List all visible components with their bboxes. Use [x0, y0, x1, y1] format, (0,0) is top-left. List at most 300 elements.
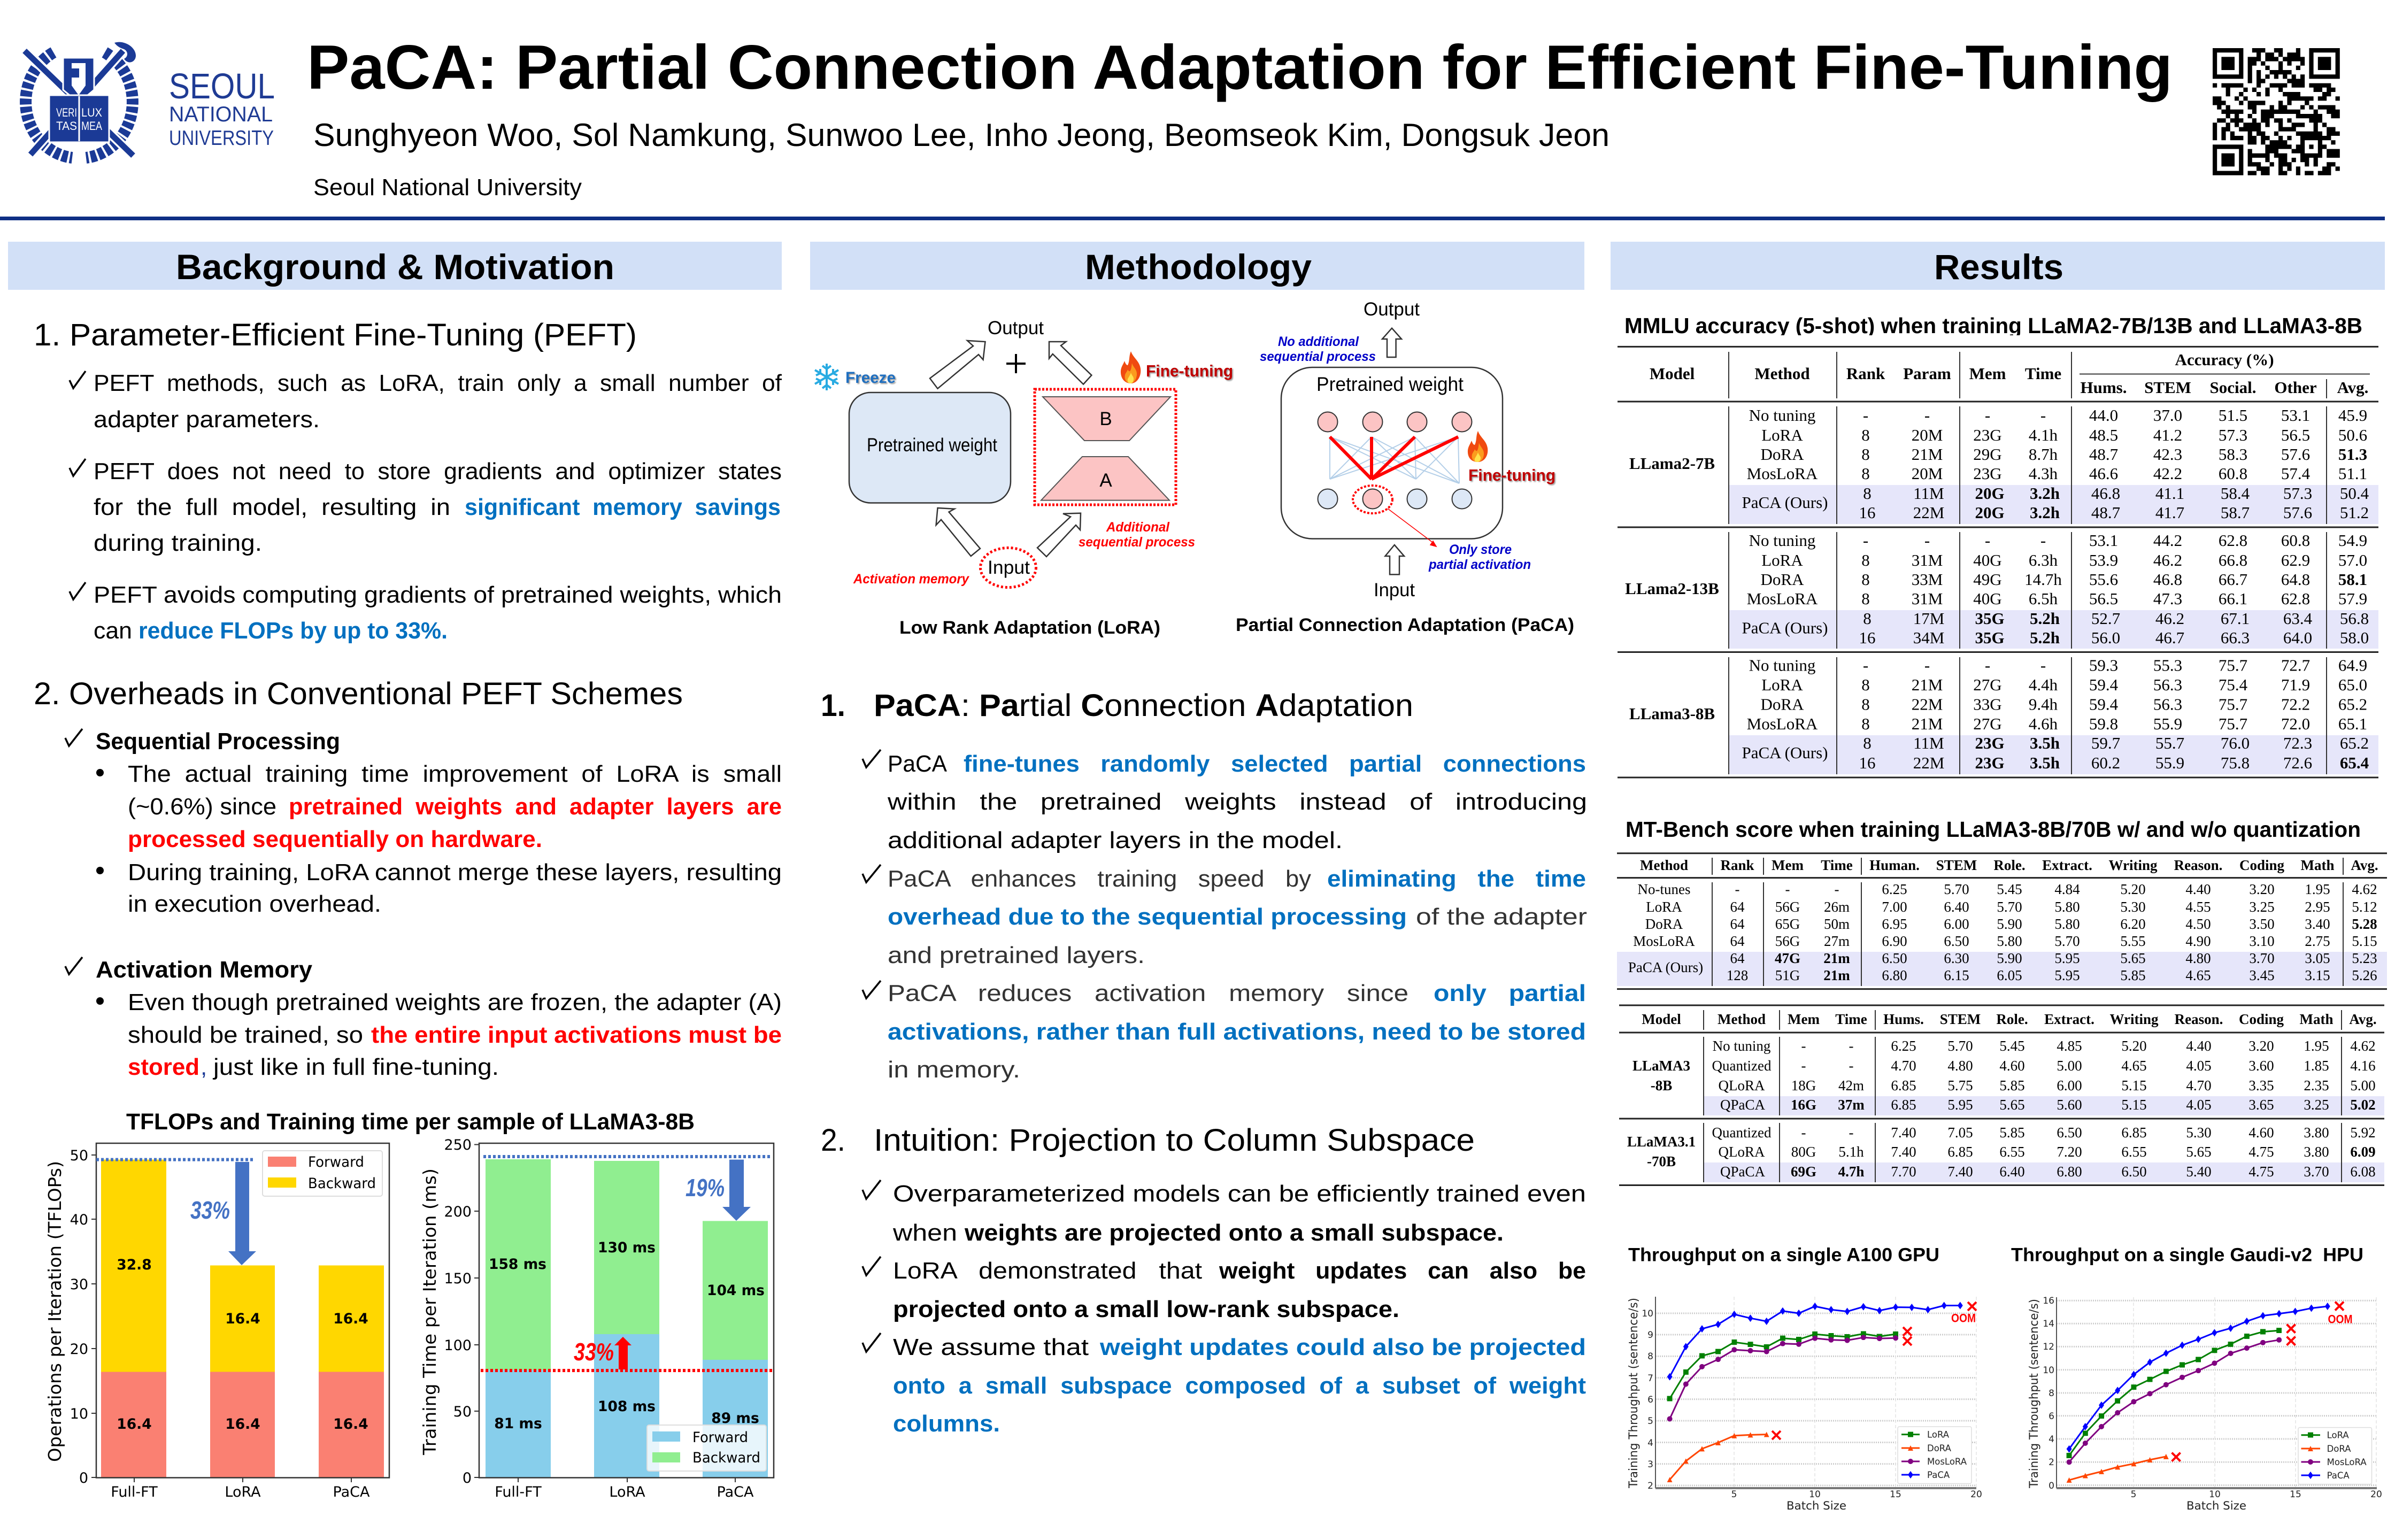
table: MT-Bench without quantization: 4.40: [2185, 881, 2211, 897]
table: MMLU accuracy: LLama2-13B: [1625, 579, 1719, 598]
table: MMLU accuracy: 55.9: [2155, 753, 2184, 772]
table: MT-Bench with quantization: -: [1801, 1058, 1806, 1074]
line chart: Gaudi-v2 throughput: 15: [2290, 1489, 2301, 1500]
table: MT-Bench with quantization: -: [1801, 1038, 1806, 1054]
table: MMLU accuracy: 66.8: [2219, 551, 2247, 569]
title: PaCA: Partial Connection Adaptation for Efficient Fine-Tuning: [307, 32, 2173, 102]
table: MMLU accuracy: 20M: [1912, 464, 1943, 483]
bullet: sequential processing: pretrained weights and adapter layers are: [289, 794, 782, 820]
bar chart: training time: 108 ms: [598, 1398, 656, 1415]
table: MMLU accuracy: 22M: [1913, 753, 1944, 772]
table: MT-Bench without quantization: 4.62: [2352, 881, 2377, 897]
bullet: activation memory: stored: [128, 1054, 199, 1080]
table: MT-Bench with quantization: 4.40: [2186, 1038, 2212, 1054]
table: MT-Bench with quantization: 3.60: [2248, 1058, 2274, 1074]
table: MT-Bench without quantization: 6.20: [2120, 916, 2146, 932]
logo wordmark: [169, 66, 275, 150]
logo wordmark: NATIONAL: [169, 103, 273, 126]
table: MMLU accuracy: No tuning: [1749, 406, 1815, 425]
bullet: sequential processing: processed sequentially on hardware.: [128, 826, 542, 852]
table: MT-Bench with quantization: Writing: [2109, 1011, 2159, 1027]
table: MMLU accuracy: 59.4: [2089, 695, 2119, 713]
table: MT-Bench with quantization: 5.75: [1947, 1077, 1973, 1094]
table: MMLU accuracy: 65.2: [2338, 695, 2367, 713]
table: MT-Bench with quantization: 7.40: [1891, 1125, 1916, 1141]
bullet: column subspace assumption: onto a small subspace composed of a subset of weight: [893, 1373, 1586, 1399]
table: MT-Bench with quantization: 6.00: [2057, 1077, 2082, 1094]
arrow: adapter to output: [1049, 342, 1091, 384]
table: MMLU accuracy: 50.4: [2340, 484, 2369, 503]
series: LoRA: [1670, 1334, 1896, 1399]
bar chart: training time: LoRA: [609, 1484, 645, 1500]
table: MMLU accuracy: -: [1863, 656, 1868, 675]
table: MMLU accuracy: 72.0: [2281, 714, 2310, 733]
bullet: memory savings: during training.: [94, 530, 262, 556]
bullet: activation memory: ,: [201, 1054, 207, 1080]
table: MMLU accuracy: 4.1h: [2029, 426, 2058, 444]
table: MMLU accuracy: 8: [1863, 484, 1872, 503]
table: MT-Bench with quantization: 2.35: [2304, 1077, 2329, 1094]
table: MMLU accuracy: 56.5: [2089, 589, 2118, 608]
table: MMLU accuracy: 40G: [1973, 551, 2002, 569]
chart title: TFLOPs and Training time per sample of LLaMA3-8B: [126, 1109, 695, 1135]
table: MT-Bench without quantization: 4.50: [2185, 916, 2211, 932]
bullet: activation memory: [65, 957, 782, 1080]
bar chart: TFLOPs: 16.4: [225, 1416, 260, 1433]
table: MT-Bench without quantization: 3.10: [2249, 933, 2275, 949]
label: output: Output: [988, 318, 1044, 338]
table: MT-Bench without quantization: 1.95: [2305, 881, 2330, 897]
table: MMLU accuracy: 27G: [1973, 675, 2002, 694]
table: MT-Bench without quantization: [1617, 853, 2387, 989]
table: MMLU accuracy: 65.1: [2338, 714, 2367, 733]
table: MMLU accuracy: 46.7: [2155, 628, 2184, 647]
bullet: activation memory: just like in full fine-tuning.: [212, 1054, 499, 1080]
table: MMLU accuracy: LoRA: [1761, 426, 1803, 444]
table: MMLU accuracy: 75.7: [2219, 656, 2247, 675]
arrow: input to adapter: [1037, 513, 1081, 557]
table: MMLU accuracy: 46.8: [2153, 570, 2182, 589]
table: MT-Bench without quantization: 5.70: [1944, 881, 1969, 897]
table: MMLU accuracy: 8: [1861, 570, 1870, 589]
table: MMLU accuracy: Rank: [1846, 364, 1885, 383]
table: MMLU accuracy: 72.6: [2283, 753, 2312, 772]
bullet: PEFT trains few parameters: PEFT methods, such as LoRA, train only a small number of: [94, 370, 782, 396]
table: MMLU accuracy: 56.3: [2153, 695, 2182, 713]
table: MT-Bench without quantization: 56G: [1775, 933, 1800, 949]
table: MMLU accuracy: 46.8: [2091, 484, 2120, 503]
table: MT-Bench without quantization: 5.55: [2120, 933, 2146, 949]
table: MT-Bench with quantization: -8B: [1651, 1077, 1672, 1094]
table: MT-Bench without quantization: Human.: [1869, 857, 1920, 873]
table: MMLU accuracy: 20G: [1975, 503, 2005, 522]
bullet: sequential processing: in execution overhead.: [128, 891, 381, 917]
arrow: pretrained to output: [930, 341, 985, 389]
line chart: A100 throughput: 2: [1647, 1481, 1653, 1491]
table: MMLU accuracy: 64.0: [2283, 628, 2312, 647]
table: MMLU accuracy: 8: [1863, 609, 1872, 628]
table: MMLU accuracy: 8: [1863, 734, 1872, 752]
table: MT-Bench without quantization: 3.25: [2249, 899, 2275, 915]
table: MT-Bench without quantization: 128: [1727, 967, 1748, 983]
table: MT-Bench with quantization: 6.85: [1891, 1097, 1916, 1113]
table: MT-Bench with quantization: 80G: [1791, 1144, 1816, 1160]
table: MT-Bench with quantization: 5.15: [2121, 1077, 2147, 1094]
table: MMLU accuracy: 27G: [1973, 714, 2002, 733]
table: MMLU accuracy: 57.9: [2338, 589, 2367, 608]
legend: Forward: [308, 1154, 364, 1171]
table: MT-Bench without quantization: 5.90: [1997, 950, 2022, 966]
note: no additional sequential process: No additional: [1278, 334, 1359, 349]
legend: Backward: [308, 1175, 376, 1192]
table: MT-Bench without quantization: 3.15: [2305, 967, 2330, 983]
table: MT-Bench with quantization: 4.75: [2248, 1164, 2274, 1180]
table: MMLU accuracy: 55.7: [2155, 734, 2184, 752]
table: MT-Bench with quantization: 5.00: [2057, 1058, 2082, 1074]
table: MMLU accuracy: 59.3: [2089, 656, 2118, 675]
table: MT-Bench with quantization: QLoRA: [1719, 1077, 1765, 1094]
caption: LoRA: Low Rank Adaptation (LoRA): [899, 618, 1160, 638]
note: only store partial activation: partial activation: [1428, 557, 1531, 572]
line chart: Gaudi-v2 throughput: 16: [2043, 1296, 2054, 1306]
table: MT-Bench without quantization: Writing: [2108, 857, 2158, 873]
table: MT-Bench with quantization: Model: [1642, 1011, 1681, 1027]
table: MMLU accuracy: No tuning: [1749, 531, 1815, 550]
chart title: Gaudi-v2: Throughput on a single Gaudi-v2 HPU: [2011, 1245, 2363, 1265]
section heading: Results: [1611, 242, 2385, 290]
bar chart: TFLOPs: 20: [70, 1341, 88, 1358]
table: MMLU accuracy: 35G: [1975, 628, 2005, 647]
table: MT-Bench with quantization: LLaMA3: [1632, 1058, 1690, 1074]
table: MT-Bench without quantization: 6.40: [1944, 899, 1969, 915]
table: MMLU accuracy: 6.3h: [2029, 551, 2058, 569]
table: MT-Bench with quantization: 1.95: [2304, 1038, 2329, 1054]
OOM markers: [2172, 1302, 2353, 1461]
table: MMLU accuracy: 59.8: [2089, 714, 2118, 733]
table: MT-Bench with quantization: 4.16: [2350, 1058, 2376, 1074]
table: MMLU accuracy: 52.7: [2091, 609, 2120, 628]
legend: PaCA: [2327, 1470, 2350, 1481]
table: MMLU accuracy: 53.1: [2089, 531, 2118, 550]
note: activation memory: Activation memory: [853, 572, 969, 587]
table: MT-Bench without quantization: 27m: [1824, 933, 1850, 949]
table: MMLU accuracy: 64.8: [2281, 570, 2310, 589]
table: MT-Bench with quantization: 6.85: [2121, 1125, 2147, 1141]
section heading: Methodology: [810, 242, 1584, 290]
table: MT-Bench without quantization: 6.05: [1997, 967, 2022, 983]
table: MMLU accuracy: 53.9: [2089, 551, 2118, 569]
bullet: training speed: eliminating the time: [1327, 866, 1586, 892]
caption: PaCA: Partial Connection Adaptation (PaCA): [1236, 615, 1574, 635]
table: MMLU accuracy: 51.3: [2338, 445, 2367, 464]
table: MMLU accuracy: 67.1: [2221, 609, 2250, 628]
table: MMLU accuracy: 71.9: [2281, 675, 2310, 694]
table: MMLU accuracy: 20M: [1912, 426, 1943, 444]
table: MT-Bench without quantization: MosLoRA: [1633, 933, 1695, 949]
legend: LoRA: [2327, 1430, 2349, 1441]
table: MMLU accuracy: 59.4: [2089, 675, 2119, 694]
table: MT-Bench with quantization: 6.85: [1891, 1077, 1916, 1094]
table: MMLU accuracy: 48.5: [2089, 426, 2118, 444]
bar chart: training time: 100: [444, 1337, 472, 1354]
arrow: to partial activation note: [1388, 509, 1436, 546]
line chart: A100 throughput: 10: [1642, 1308, 1653, 1319]
table: MMLU accuracy: LoRA: [1761, 675, 1803, 694]
bar chart: training time: 250: [444, 1137, 472, 1153]
table: MT-Bench with quantization: 5.85: [1999, 1077, 2025, 1094]
table: MT-Bench without quantization: 5.80: [2054, 916, 2080, 932]
table: MMLU accuracy: STEM: [2144, 378, 2191, 397]
bullet: activation memory: in memory.: [888, 1057, 1020, 1083]
bullet: partial connections: PaCA: [888, 751, 948, 777]
table: MMLU accuracy: 8: [1861, 714, 1870, 733]
table: MT-Bench with quantization: 6.50: [2057, 1125, 2082, 1141]
table: MMLU accuracy: 56.3: [2153, 675, 2182, 694]
label: output: Output: [1364, 299, 1420, 320]
table: MT-Bench without quantization: 5.85: [2120, 967, 2146, 983]
table: MT-Bench with quantization: 16G: [1791, 1097, 1816, 1113]
series: PaCA: [1670, 1306, 1960, 1377]
line chart: A100 throughput: 3: [1647, 1459, 1653, 1470]
bullet: column subspace assumption: We assume that: [893, 1334, 1089, 1360]
table: MMLU accuracy: LoRA: [1761, 551, 1803, 569]
table: MMLU accuracy: -: [1924, 656, 1930, 675]
table: MMLU accuracy: Avg.: [2337, 378, 2368, 397]
table: MT-Bench with quantization: Reason.: [2175, 1011, 2223, 1027]
table: MT-Bench without quantization: 4.90: [2185, 933, 2211, 949]
bar chart: TFLOPs: 50: [70, 1148, 88, 1164]
table: MT-Bench with quantization: 4.80: [1947, 1058, 1973, 1074]
table: MT-Bench without quantization: 64: [1730, 950, 1745, 966]
table: MMLU accuracy: 5.2h: [2030, 628, 2060, 647]
table: MMLU accuracy: 4.6h: [2029, 714, 2058, 733]
bar chart: TFLOPs: [44, 1143, 389, 1500]
table: MMLU accuracy: MosLoRA: [1747, 714, 1818, 733]
table: MT-Bench without quantization: 65G: [1775, 916, 1800, 932]
table: MMLU accuracy: 65.4: [2340, 753, 2369, 772]
affiliation: Seoul National University: [313, 174, 582, 201]
bullet: training speed: of the adapter: [1416, 904, 1587, 930]
arrow: 33% reduction: [228, 1162, 256, 1265]
icon: flame: [1121, 351, 1141, 383]
bar chart: training time: 130 ms: [598, 1239, 656, 1256]
block: pretrained weight: [849, 392, 1011, 503]
arrow: to output: [1382, 328, 1401, 357]
line chart: A100 throughput: [1627, 1297, 1982, 1512]
table: MMLU accuracy: 33G: [1973, 695, 2002, 713]
table: MMLU accuracy: 8: [1861, 445, 1870, 464]
table: MT-Bench without quantization: PaCA (Ours): [1628, 959, 1703, 975]
table: MT-Bench without quantization: 50m: [1824, 916, 1850, 932]
table: MT-Bench with quantization: 5.65: [2186, 1144, 2212, 1160]
table: MT-Bench without quantization: 3.70: [2249, 950, 2275, 966]
table: MT-Bench with quantization: 5.40: [2186, 1164, 2212, 1180]
line chart: Gaudi-v2 throughput: 12: [2043, 1342, 2054, 1352]
arrow: input to pretrained: [936, 508, 980, 556]
table: MT-Bench with quantization: 18G: [1791, 1077, 1816, 1094]
table: MT-Bench with quantization: 3.80: [2304, 1125, 2329, 1141]
bullet: PEFT trains few parameters: adapter parameters.: [94, 406, 320, 433]
table: MT-Bench without quantization: 3.05: [2305, 950, 2330, 966]
legend: [1898, 1427, 1972, 1483]
block: adapter layers: [1035, 389, 1176, 505]
table: MT-Bench with quantization: 6.50: [2121, 1164, 2147, 1180]
block: adapter layers: B: [1099, 409, 1112, 429]
bar chart: training time: 200: [444, 1204, 472, 1220]
line chart: Gaudi-v2 throughput: 6: [2049, 1411, 2054, 1422]
line chart: A100 throughput: 9: [1647, 1330, 1653, 1341]
table: MT-Bench with quantization: 7.20: [2057, 1144, 2082, 1160]
table: MT-Bench without quantization: 3.20: [2249, 881, 2275, 897]
bar chart: TFLOPs: Operations per Iteration (TFLOPs): [44, 1161, 65, 1462]
bar chart: training time: Full-FT: [495, 1484, 542, 1500]
section heading: Background & Motivation: [8, 242, 782, 290]
table: MT-Bench with quantization: 7.40: [1891, 1144, 1916, 1160]
table: MMLU accuracy: DoRA: [1761, 695, 1804, 713]
table: MT-Bench without quantization: Extract.: [2042, 857, 2092, 873]
table: MT-Bench without quantization: DoRA: [1645, 916, 1683, 932]
table: MT-Bench with quantization: 6.55: [1999, 1144, 2025, 1160]
table: MT-Bench with quantization: 6.40: [1999, 1164, 2025, 1180]
table: MMLU accuracy: 8: [1861, 551, 1870, 569]
icon: university emblem: MEA: [81, 119, 102, 133]
table: MMLU accuracy: 3.2h: [2030, 503, 2060, 522]
block: adapter layers: A: [1099, 470, 1112, 491]
section heading: Background & Motivation: Background & Motivation: [176, 247, 614, 287]
line chart: A100 throughput: 4: [1647, 1438, 1653, 1449]
bullet: activation memory: the entire input activations must be: [371, 1022, 782, 1048]
table: MMLU accuracy: 8: [1861, 589, 1870, 608]
bar chart: TFLOPs: 32.8: [117, 1257, 152, 1273]
section heading: Results: Results: [1934, 247, 2063, 287]
bullet: FLOPs reduction: can: [94, 618, 132, 644]
bar chart: TFLOPs: PaCA: [333, 1484, 370, 1500]
table: MT-Bench without quantization: 6.15: [1944, 967, 1969, 983]
table: MT-Bench with quantization: 5.1h: [1838, 1144, 1864, 1160]
table: MMLU accuracy: -: [2040, 656, 2046, 675]
table: MMLU accuracy: Social.: [2210, 378, 2256, 397]
arrow: 19% reduction: [722, 1160, 751, 1221]
bar chart: training time: 104 ms: [707, 1282, 765, 1299]
label: freeze: Freeze: [845, 369, 896, 387]
bar chart: training time: 89 ms: [711, 1410, 759, 1427]
bullet: activation memory: should be trained, so: [128, 1022, 363, 1048]
icon: QR code: [2213, 50, 2340, 173]
heading: PaCA: PaCA: Partial Connection Adaptation: [874, 688, 1413, 723]
table: MMLU accuracy: 75.8: [2221, 753, 2250, 772]
bullet: LoRA low-rank subspace: projected onto a small low-rank subspace.: [893, 1296, 1399, 1322]
table: MT-Bench without quantization: LoRA: [1646, 899, 1682, 915]
table: MMLU accuracy: 22M: [1913, 503, 1944, 522]
table: MT-Bench without quantization: 5.65: [2120, 950, 2146, 966]
table: MMLU accuracy: 62.9: [2281, 551, 2310, 569]
table: MMLU accuracy: -: [1985, 656, 1990, 675]
bullet: memory savings: significant memory savings: [465, 494, 781, 520]
bullet: memory savings: [70, 458, 782, 556]
table: MT-Bench with quantization: 1.85: [2304, 1058, 2329, 1074]
table: MT-Bench without quantization: 5.45: [1997, 881, 2022, 897]
note: additional sequential process: Additional: [1106, 520, 1170, 535]
table: MT-Bench with quantization: -70B: [1647, 1153, 1676, 1169]
series: PaCA: [2069, 1306, 2328, 1449]
table: MMLU accuracy: 66.7: [2219, 570, 2247, 589]
table: MMLU accuracy: -: [2040, 406, 2046, 425]
line chart: Gaudi-v2 throughput: 20: [2370, 1489, 2382, 1500]
table: MMLU accuracy: 56.8: [2340, 609, 2369, 628]
table: MMLU accuracy: MosLoRA: [1747, 589, 1818, 608]
table: MMLU accuracy: 75.7: [2219, 695, 2247, 713]
table: MT-Bench without quantization: Method: [1640, 857, 1688, 873]
table: MT-Bench without quantization: -: [1834, 881, 1839, 897]
table: MT-Bench without quantization: 5.20: [2120, 881, 2146, 897]
legend: LoRA: [1927, 1430, 1950, 1439]
table: MMLU accuracy: 49G: [1973, 570, 2002, 589]
table: MT-Bench without quantization: Reason.: [2174, 857, 2222, 873]
table: MT-Bench with quantization: Extract.: [2044, 1011, 2094, 1027]
table: MMLU accuracy: 3.5h: [2030, 734, 2060, 752]
series: DoRA: [1670, 1435, 1767, 1480]
table: MMLU accuracy: -: [1985, 531, 1990, 550]
table: MMLU accuracy: 57.3: [2283, 484, 2312, 503]
table: MMLU accuracy: 58.7: [2221, 503, 2250, 522]
bullet: memory savings: PEFT does not need to store gradients and optimizer states: [94, 458, 782, 484]
table: MT-Bench without quantization: 5.12: [2352, 899, 2377, 915]
table: MMLU accuracy: 44.2: [2153, 531, 2182, 550]
line chart: A100 throughput: Batch Size: [1786, 1499, 1846, 1512]
table: MT-Bench with quantization: 7.70: [1891, 1164, 1916, 1180]
bullet: sequential processing: (~0.6%) since: [128, 794, 276, 820]
logo wordmark: SEOUL: [169, 66, 275, 106]
table: MT-Bench with quantization: 4.05: [2186, 1097, 2212, 1113]
bullet: activation memory: Activation Memory: [96, 957, 313, 983]
table: MMLU accuracy: 21M: [1912, 714, 1943, 733]
table: MT-Bench with quantization: 5.30: [2186, 1125, 2212, 1141]
table: MT-Bench with quantization: 5.95: [1947, 1097, 1973, 1113]
table: MT-Bench without quantization: 3.45: [2249, 967, 2275, 983]
table: MMLU accuracy: Other: [2274, 378, 2317, 397]
heading: Intuition: 2.: [821, 1123, 845, 1158]
table: MT-Bench with quantization: 5.60: [2057, 1097, 2082, 1113]
table: MT-Bench with quantization: QLoRA: [1719, 1144, 1765, 1160]
table: MT-Bench with quantization: 4.60: [2248, 1125, 2274, 1141]
bar chart: TFLOPs: 16.4: [333, 1311, 368, 1327]
panel: Results: [1604, 242, 2395, 1512]
line chart: A100 throughput: 10: [1809, 1489, 1821, 1500]
table: MT-Bench without quantization: 47G: [1775, 950, 1800, 966]
legend: Forward: [692, 1429, 748, 1446]
bar chart: training time: [419, 1137, 774, 1500]
table: MMLU accuracy: 58.4: [2221, 484, 2250, 503]
legend: [2298, 1428, 2372, 1484]
table: MMLU accuracy: 46.2: [2153, 551, 2182, 569]
bullet: overparameterized models: [862, 1180, 1586, 1246]
table: MMLU accuracy: 59.7: [2091, 734, 2120, 752]
table: MMLU accuracy: 3.5h: [2030, 753, 2060, 772]
bar chart: training time: 81 ms: [494, 1415, 542, 1432]
note: additional sequential process: sequential process: [1079, 535, 1195, 550]
table: MT-Bench without quantization: 5.95: [2054, 967, 2080, 983]
line chart: Gaudi-v2 throughput: 5: [2131, 1489, 2136, 1500]
bullet: LoRA low-rank subspace: weight updates can also be: [1219, 1258, 1586, 1284]
table: MMLU accuracy: 3.2h: [2030, 484, 2060, 503]
line chart: Gaudi-v2 throughput: 14: [2043, 1319, 2054, 1329]
table: MMLU accuracy: 46.6: [2089, 464, 2118, 483]
table: MT-Bench without quantization: 5.70: [1997, 899, 2022, 915]
panel: Background & Motivation: [8, 242, 782, 1500]
table: MMLU accuracy: 60.8: [2281, 531, 2310, 550]
diagram: LoRA: [815, 318, 1233, 638]
table: MMLU accuracy: -: [1924, 406, 1930, 425]
